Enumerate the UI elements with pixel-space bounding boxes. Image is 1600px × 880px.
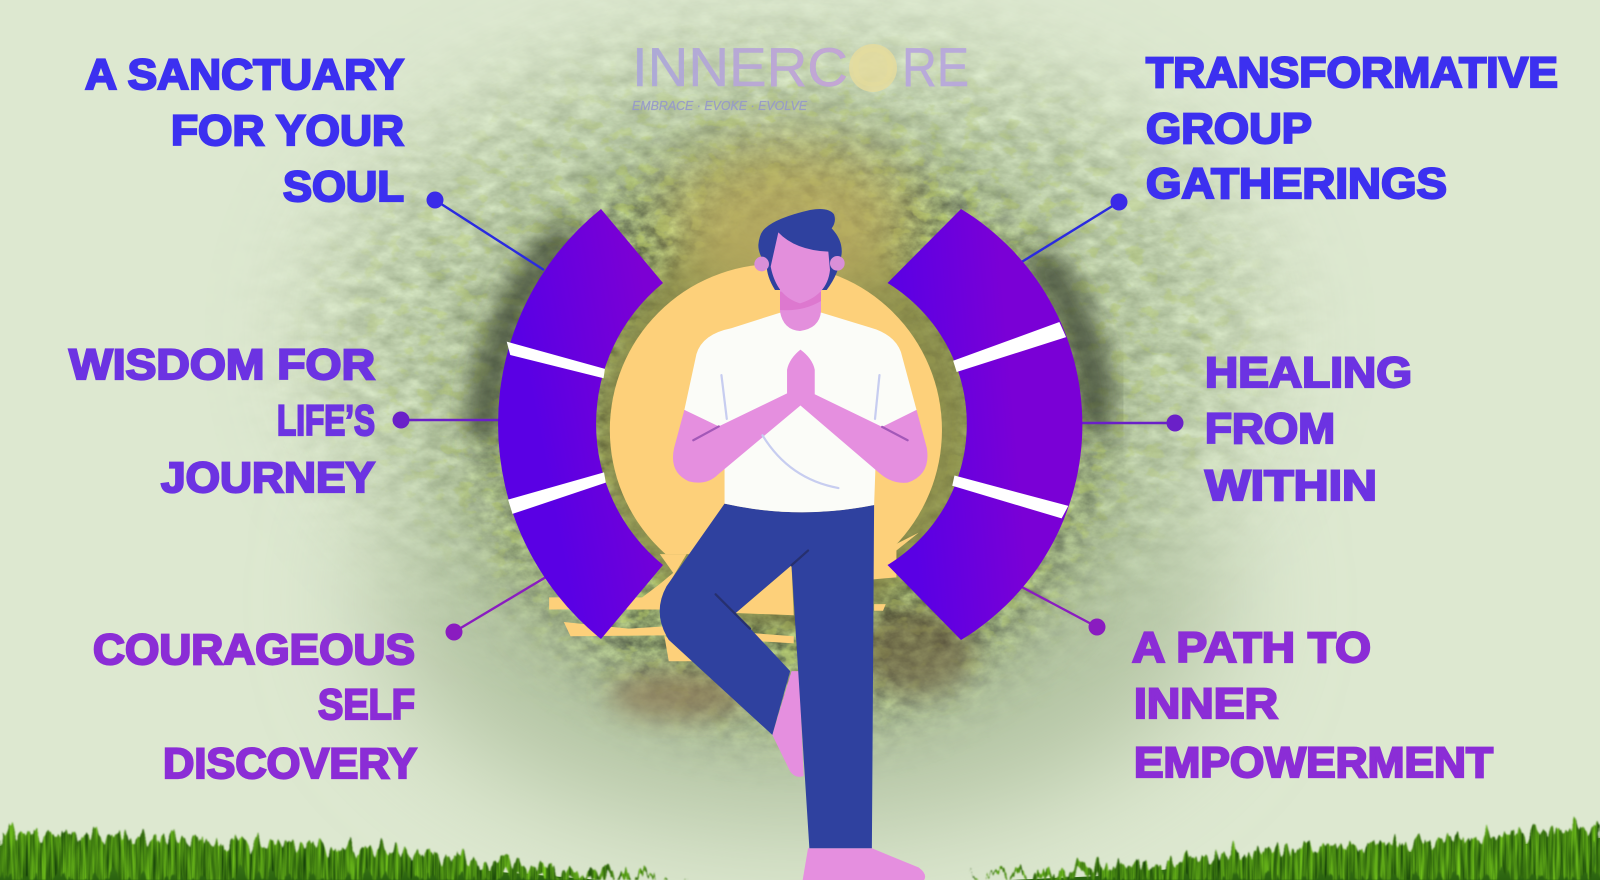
heading: a sanctuary for your soul: A SANCTUARY xyxy=(85,51,404,99)
standing foot xyxy=(803,848,925,880)
meditating figure in tree pose xyxy=(660,209,927,880)
heading: transformative group gatherings: GROUP xyxy=(1146,105,1312,153)
connector: path xyxy=(1018,585,1106,636)
hair xyxy=(758,209,842,290)
face xyxy=(771,232,830,303)
heading: wisdom for life's journey: LIFE’S xyxy=(277,397,375,445)
heading: transformative group gatherings: TRANSFORMATIVE xyxy=(1146,49,1558,97)
heading: a path to inner empowerment: EMPOWERMENT xyxy=(1134,739,1493,787)
neck shadow xyxy=(780,292,821,310)
heading: transformative group gatherings: GATHERINGS xyxy=(1146,160,1447,208)
logo wordmark: INNERC xyxy=(632,36,848,98)
heading: a path to inner empowerment xyxy=(1132,624,1493,787)
grass: right xyxy=(970,826,1600,880)
heading: healing from within: FROM xyxy=(1205,405,1335,453)
shirt xyxy=(684,313,917,512)
left ring band xyxy=(498,209,663,639)
heading: healing from within: HEALING xyxy=(1205,349,1412,397)
body xyxy=(660,313,927,880)
connector: transformative xyxy=(1020,194,1128,263)
head xyxy=(754,209,845,331)
heading: a path to inner empowerment: A PATH TO xyxy=(1132,624,1371,672)
connector: healing xyxy=(1080,414,1184,432)
connector lines xyxy=(392,192,1184,640)
shirt and arm details xyxy=(693,375,908,629)
heading: a sanctuary for your soul: SOUL xyxy=(283,163,404,211)
grass: left xyxy=(0,832,690,880)
heading: transformative group gatherings xyxy=(1146,49,1558,208)
neck xyxy=(780,288,821,331)
logo wordmark xyxy=(632,36,969,98)
trousers xyxy=(660,504,874,848)
sun disc and reflection xyxy=(549,264,942,661)
heading: healing from within xyxy=(1205,349,1412,510)
heading: wisdom for life's journey: JOURNEY xyxy=(161,454,375,502)
right ring band xyxy=(888,209,1082,640)
heading: courageous self discovery: SELF xyxy=(318,681,415,729)
heading: a sanctuary for your soul xyxy=(85,51,404,211)
heading: courageous self discovery: COURAGEOUS xyxy=(93,626,415,674)
connector: courageous xyxy=(446,577,546,640)
arms and hands xyxy=(673,350,927,483)
heading: courageous self discovery: DISCOVERY xyxy=(163,740,417,788)
ears xyxy=(754,256,845,271)
logo wordmark: RE xyxy=(902,36,969,98)
heading: a sanctuary for your soul: FOR YOUR xyxy=(171,107,404,155)
heading: wisdom for life's journey: WISDOM FOR xyxy=(69,341,375,389)
heading: courageous self discovery xyxy=(93,626,417,788)
logo xyxy=(632,36,969,113)
connector: sanctuary xyxy=(426,192,544,270)
heading: wisdom for life's journey xyxy=(69,341,375,502)
raised foot xyxy=(772,671,804,777)
heading: a path to inner empowerment: INNER xyxy=(1134,680,1278,728)
logo tagline: EMBRACE · EVOKE · EVOLVE xyxy=(632,98,807,113)
logo wordmark: O xyxy=(850,36,896,98)
connector: wisdom xyxy=(392,412,500,428)
heading: healing from within: WITHIN xyxy=(1205,462,1377,510)
